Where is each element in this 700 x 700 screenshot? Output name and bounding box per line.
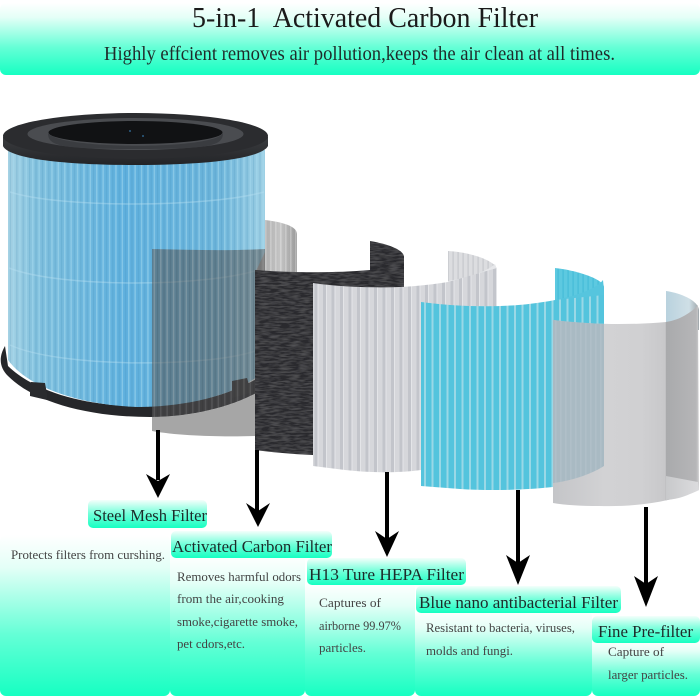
label: Steel Mesh Filter xyxy=(88,500,208,528)
panel: steel mesh layer xyxy=(152,220,297,436)
carbon front sheet xyxy=(255,262,404,455)
panel: pre-filter description xyxy=(592,640,700,696)
activated carbon text: pet cdors,etc. xyxy=(177,636,245,651)
pre-filter sheet xyxy=(553,305,699,506)
title: 5-in-1 Activated Carbon Filter xyxy=(192,2,538,34)
panel: HEPA layer xyxy=(313,251,497,472)
panel: activated carbon layer xyxy=(255,241,404,455)
steel mesh text: Protects filters from curshing. xyxy=(11,547,165,562)
blue pleated body xyxy=(8,150,265,407)
HEPA front pleats xyxy=(313,268,497,472)
arrow: pre-filter xyxy=(634,507,658,607)
pre-filter text: Capture of xyxy=(608,644,665,659)
mesh lower section xyxy=(152,394,255,436)
label: Activated Carbon Filter: Activated Carbon Filter xyxy=(172,537,333,556)
panel: steel mesh description xyxy=(0,535,170,696)
activated carbon text: smoke,cigarette smoke, xyxy=(177,614,298,629)
arrow: HEPA xyxy=(375,472,399,557)
subtitle: Highly effcient removes air pollution,keeps the air clean at all times. xyxy=(104,44,615,65)
panel: activated carbon description xyxy=(170,555,305,696)
panel: blue nano description xyxy=(415,611,592,696)
activated carbon text: from the air,cooking xyxy=(177,591,284,606)
label: Activated Carbon Filter xyxy=(171,531,333,558)
HEPA text: Captures of xyxy=(319,595,382,610)
HEPA text: airborne 99.97% xyxy=(319,618,401,633)
HEPA text xyxy=(319,595,401,655)
base ring xyxy=(1,346,258,417)
panel: HEPA description xyxy=(305,583,415,696)
arrow: blue nano xyxy=(506,490,530,585)
blue nano text: Resistant to bacteria, viruses, xyxy=(426,620,575,635)
HEPA back pleats xyxy=(448,251,497,306)
pre-filter text xyxy=(608,644,688,682)
blue back pleats xyxy=(555,268,604,325)
arrow: activated carbon xyxy=(246,450,270,527)
label: Fine Pre-filter: Fine Pre-filter xyxy=(598,622,694,641)
pre-filter back curve xyxy=(666,291,699,330)
panel: fine pre-filter layer xyxy=(553,291,699,506)
blue nano text xyxy=(426,620,575,658)
blue nano text: molds and fungi. xyxy=(426,643,513,658)
HEPA text: particles. xyxy=(319,640,366,655)
label: Blue nano antibacterial Filter: Blue nano antibacterial Filter xyxy=(419,593,619,612)
base clips xyxy=(30,378,250,400)
blue front pleats xyxy=(421,295,604,490)
pre-filter text: larger particles. xyxy=(608,667,688,682)
label: Blue nano antibacterial Filter xyxy=(416,586,621,613)
header banner xyxy=(0,2,700,75)
carbon back curve xyxy=(370,241,404,300)
mesh front translucent xyxy=(152,249,265,417)
activated carbon text: Removes harmful odors xyxy=(177,569,301,584)
activated carbon text xyxy=(177,569,301,651)
label: H13 Ture HEPA Filter xyxy=(307,558,466,585)
pre-filter lower lip xyxy=(666,476,699,500)
label: Steel Mesh Filter: Steel Mesh Filter xyxy=(93,506,208,525)
assembled filter cartridge xyxy=(1,113,268,417)
translucent overlap xyxy=(553,320,604,483)
label: H13 Ture HEPA Filter: H13 Ture HEPA Filter xyxy=(309,565,465,584)
arrow: steel mesh xyxy=(146,430,170,498)
top rim xyxy=(3,113,268,165)
mesh back curve xyxy=(255,220,297,273)
panel: blue nano layer xyxy=(421,268,604,490)
label: Fine Pre-filter xyxy=(592,616,700,643)
